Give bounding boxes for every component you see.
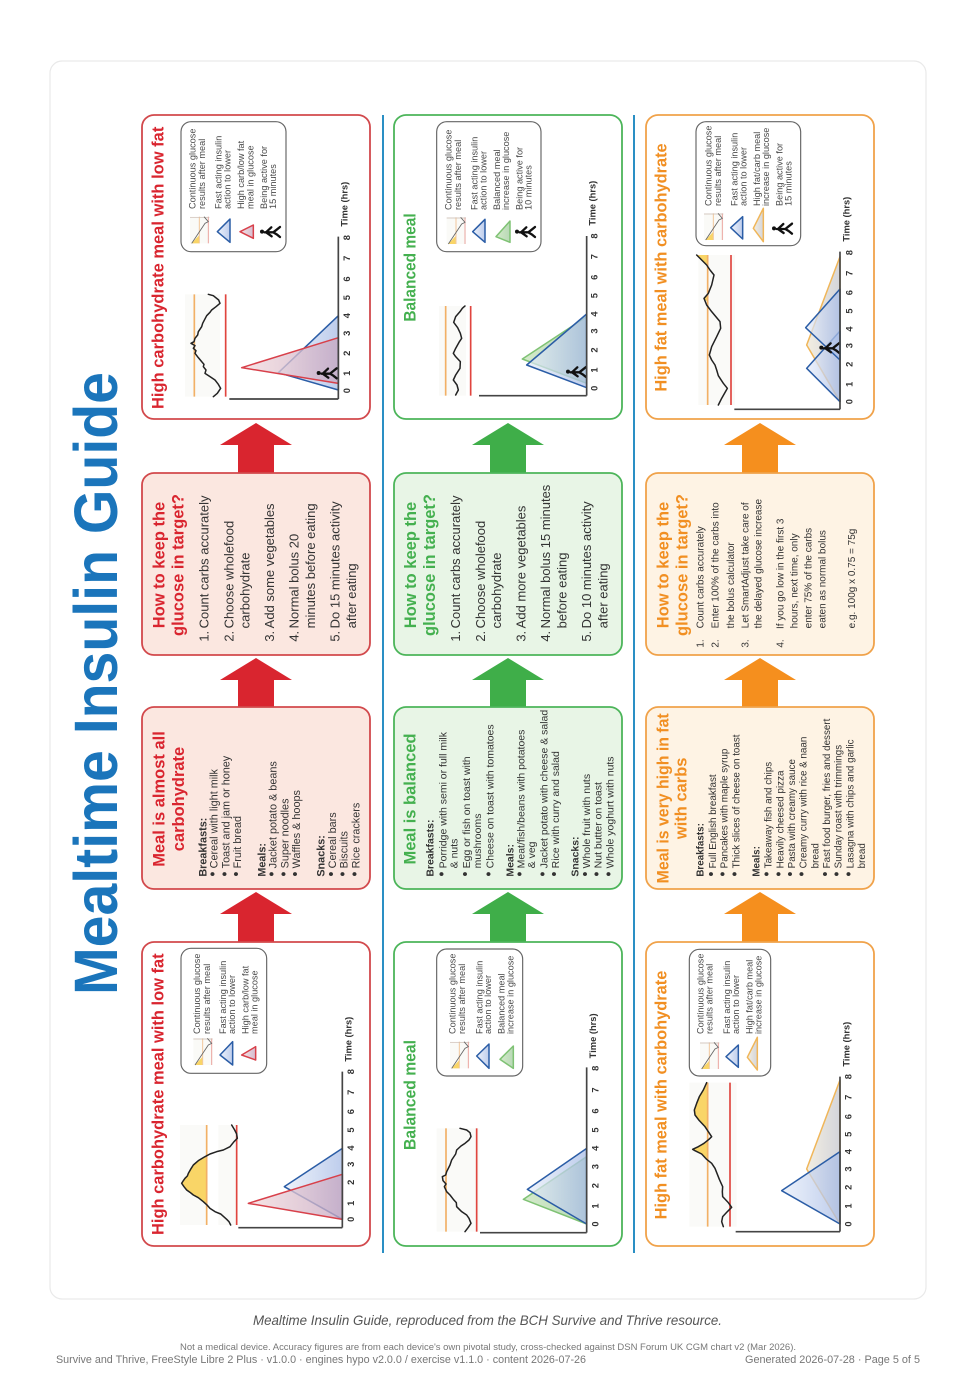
panel: meal is balanced: Meals: bbox=[505, 844, 516, 877]
chart axes and triangles: 6 bbox=[346, 1109, 356, 1114]
chart axes and triangles bbox=[229, 182, 352, 399]
panel: how to keep the glucose in target, red: Add some vegetables bbox=[262, 503, 277, 628]
panel: meal is almost all carbohydrate: Snacks: bbox=[315, 835, 327, 877]
panel: meal is balanced: Meat/fish/beans with potatoes bbox=[516, 730, 527, 868]
chart axes and triangles: 7 bbox=[346, 1090, 356, 1095]
heading: High fat meal with carbohydrate bbox=[653, 971, 671, 1219]
panel: meal is almost all carbohydrate: Toast and jam or honey bbox=[220, 755, 232, 868]
panel: how to keep the glucose in target, green: 4. bbox=[538, 631, 553, 642]
panel: how to keep the glucose in target, orange: e.g. 100g x 0.75 = 75g bbox=[847, 529, 858, 628]
panel: meal is almost all carbohydrate bbox=[142, 707, 370, 889]
arrows: green column bbox=[472, 423, 544, 942]
glucose trace bbox=[697, 255, 735, 405]
panel: how to keep the glucose in target, orange: eaten as normal bolus bbox=[818, 530, 829, 628]
chart axes and triangles: 3 bbox=[590, 1164, 600, 1169]
panel: meal is balanced: • bbox=[590, 872, 606, 877]
panel: meal is very high in fat with carbs: bread bbox=[810, 843, 821, 868]
panel: meal is balanced: & veg bbox=[527, 841, 538, 868]
chart axes and triangles: 3 bbox=[346, 1162, 356, 1167]
panel: meal is balanced: • bbox=[601, 872, 617, 877]
chart axes and triangles: 3 bbox=[590, 328, 600, 334]
panel: how to keep the glucose in target, red: glucose in target? bbox=[169, 494, 187, 636]
panel: meal is very high in fat with carbs: • bbox=[795, 872, 811, 877]
chart axes and triangles: 6 bbox=[342, 276, 352, 282]
chart axes and triangles: 4 bbox=[844, 1148, 854, 1154]
panel: meal is almost all carbohydrate: Meals: bbox=[257, 843, 269, 877]
legend: meal in glucose bbox=[250, 970, 260, 1034]
legend: 15 minutes bbox=[784, 161, 794, 206]
panel: how to keep the glucose in target, orange: Enter 100% of the carbs into bbox=[710, 502, 721, 628]
panel: meal is balanced: Jacket potato with cheese & salad bbox=[540, 710, 551, 868]
panel: meal is very high in fat with carbs: • bbox=[818, 872, 834, 877]
legend: Fast acting insulin bbox=[722, 961, 732, 1034]
legend: High carb/low fat bbox=[240, 965, 250, 1034]
panel: meal is very high in fat with carbs: with carbs bbox=[673, 758, 691, 840]
chart axes and triangles: Time (hrs) bbox=[340, 182, 350, 227]
chart axes and triangles: Time (hrs) bbox=[841, 197, 851, 242]
legend: Balanced meal bbox=[496, 973, 506, 1034]
chart axes and triangles: 7 bbox=[844, 1095, 854, 1100]
chart axes and triangles: 7 bbox=[342, 256, 352, 261]
panel: meal is almost all carbohydrate: Rice crackers bbox=[350, 802, 362, 868]
panel: meal is almost all carbohydrate: • bbox=[288, 872, 304, 877]
panel: how to keep the glucose in target, red: 5. bbox=[327, 631, 342, 642]
chart axes and triangles: 4 bbox=[590, 311, 600, 317]
chart axes and triangles: 6 bbox=[844, 290, 854, 295]
panel: meal is balanced bbox=[394, 707, 622, 889]
legend: High fat/carb meal bbox=[752, 132, 762, 206]
panel: meal is balanced: Rice with curry and salad bbox=[551, 751, 562, 868]
panel: meal is very high in fat with carbs: • bbox=[841, 872, 857, 877]
panel: meal is very high in fat with carbs: Breakfasts: bbox=[695, 823, 706, 877]
chart axes and triangles: Time (hrs) bbox=[588, 1013, 598, 1058]
panel: how to keep the glucose in target, red: 4. bbox=[286, 631, 301, 642]
panel: meal is balanced: Meal is balanced bbox=[402, 733, 420, 865]
legend: Continuous glucose bbox=[188, 129, 198, 209]
legend: results after meal bbox=[197, 139, 207, 209]
panel: how to keep the glucose in target, orange: hours, next time, only bbox=[790, 533, 801, 628]
legend: High carb/low fat bbox=[236, 140, 246, 209]
panel: how to keep the glucose in target, green: Choose wholefood bbox=[473, 521, 488, 628]
panel: meal is very high in fat with carbs: Lasagna with chips and garlic bbox=[845, 739, 856, 868]
panel: how to keep the glucose in target, green: carbohydrate bbox=[489, 553, 504, 628]
panel: meal is almost all carbohydrate: Breakfasts: bbox=[198, 818, 210, 877]
heading: Balanced meal bbox=[402, 1040, 420, 1150]
panel: meal is very high in fat with carbs: Fast food burger, fries and dessert bbox=[822, 718, 833, 868]
panel: how to keep the glucose in target, red: Normal bolus 20 bbox=[286, 534, 301, 628]
title: Mealtime Insulin Guide bbox=[62, 372, 130, 995]
chart axes and triangles: 0 bbox=[342, 388, 352, 393]
chart axes and triangles: 0 bbox=[590, 1221, 600, 1227]
panel: meal is balanced: • bbox=[481, 872, 497, 877]
chart axes and triangles: 8 bbox=[590, 233, 600, 239]
panel: meal is very high in fat with carbs: bread bbox=[857, 843, 868, 868]
chart axes and triangles: Time (hrs) bbox=[588, 181, 598, 226]
panel: meal is balanced: & nuts bbox=[450, 839, 461, 868]
panel: meal is very high in fat with carbs: • bbox=[783, 872, 799, 877]
chart axes and triangles bbox=[736, 1022, 854, 1232]
glucose trace bbox=[689, 1083, 737, 1227]
panel: meal is balanced: • bbox=[578, 872, 594, 877]
panel: how to keep the glucose in target, orange: 1. bbox=[695, 639, 706, 648]
panel: how to keep the glucose in target, red: 2. bbox=[221, 631, 236, 642]
chart axes and triangles: 7 bbox=[590, 254, 600, 259]
chart axes and triangles bbox=[238, 1017, 356, 1228]
chart axes and triangles: 5 bbox=[590, 1127, 600, 1133]
panel: meal is very high in fat with carbs: Sunday roast with trimmings bbox=[834, 745, 845, 868]
chart axes and triangles: 8 bbox=[844, 250, 854, 255]
chart axes and triangles bbox=[480, 1013, 600, 1233]
heading: High fat meal with carbohydrate bbox=[653, 143, 671, 392]
panel: how to keep the glucose in target, orange: the delayed glucose increase bbox=[754, 499, 765, 628]
panel: meal is almost all carbohydrate: Fruit bread bbox=[232, 816, 244, 868]
panel: meal is very high in fat with carbs: Pasta with creamy sauce bbox=[787, 759, 798, 868]
legend: results after meal bbox=[453, 140, 463, 210]
panel: meal is almost all carbohydrate: • bbox=[324, 872, 340, 877]
panel: how to keep the glucose in target, orange: glucose in target? bbox=[673, 494, 691, 636]
panel: meal is almost all carbohydrate: carbohydrate bbox=[170, 747, 188, 851]
panel: meal is balanced: Nut butter on toast bbox=[594, 782, 605, 868]
footer version info: Survive and Thrive, FreeStyle Libre 2 Plus · v1.0.0 · engines hypo v2.0.0 / exercise v1.1.0 · content 2026-07-26 bbox=[56, 1354, 586, 1366]
panel: how to keep the glucose in target, green: Count carbs accurately bbox=[448, 495, 463, 628]
panel: meal is balanced: Egg or fish on toast with bbox=[462, 756, 473, 868]
chart axes and triangles: 2 bbox=[844, 362, 854, 367]
legend: Continuous glucose bbox=[448, 954, 458, 1034]
panel: meal is balanced: • bbox=[536, 872, 552, 877]
panel: how to keep the glucose in target, red: Do 15 minutes activity bbox=[327, 501, 342, 628]
chart axes and triangles: 1 bbox=[346, 1201, 356, 1206]
panel: meal is balanced: Whole yoghurt with nuts bbox=[605, 756, 616, 868]
panel: how to keep the glucose in target, red: 1. bbox=[196, 631, 211, 642]
legend: results after meal bbox=[705, 964, 715, 1034]
chart axes and triangles: 0 bbox=[844, 1221, 854, 1227]
chart axes and triangles: 6 bbox=[590, 275, 600, 280]
chart axes and triangles: 5 bbox=[346, 1127, 356, 1133]
panel: meal is very high in fat with carbs: Full English breakfast bbox=[708, 774, 719, 868]
chart axes and triangles: 2 bbox=[590, 1183, 600, 1188]
chart axes and triangles: 1 bbox=[342, 371, 352, 376]
panel: meal is balanced: Breakfasts: bbox=[425, 820, 436, 877]
legend: action to lower bbox=[223, 150, 233, 209]
legend: increase in glucose bbox=[761, 128, 771, 206]
panel: how to keep the glucose in target, orange: 3. bbox=[740, 639, 751, 648]
legend: meal in glucose bbox=[245, 145, 255, 209]
legend: Continuous glucose bbox=[444, 130, 454, 210]
panel: meal is very high in fat with carbs: • bbox=[771, 872, 787, 877]
panel: meal is almost all carbohydrate: • bbox=[335, 872, 351, 877]
panel: meal is very high in fat with carbs: • bbox=[727, 872, 743, 877]
panel: how to keep the glucose in target, orange bbox=[646, 473, 874, 655]
chart axes and triangles: 8 bbox=[844, 1074, 854, 1079]
legend: Fast acting insulin bbox=[730, 133, 740, 206]
chart axes and triangles: Time (hrs) bbox=[841, 1022, 851, 1067]
legend: Continuous glucose bbox=[695, 954, 705, 1034]
chart axes and triangles: Time (hrs) bbox=[344, 1017, 354, 1062]
panel: how to keep the glucose in target, green: 2. bbox=[473, 631, 488, 642]
panel: how to keep the glucose in target, red: 3. bbox=[262, 631, 277, 642]
panel: meal is almost all carbohydrate: • bbox=[265, 872, 281, 877]
legend: Fast acting insulin bbox=[214, 136, 224, 209]
arrows: red column bbox=[220, 423, 292, 942]
heading: High carbohydrate meal with low fat bbox=[149, 953, 167, 1235]
legend: 15 minutes bbox=[268, 164, 278, 209]
panel: meal is balanced: • bbox=[512, 872, 528, 877]
panel: how to keep the glucose in target, red: after eating bbox=[344, 563, 359, 628]
panel: meal is balanced: Porridge with semi or full milk bbox=[439, 731, 450, 868]
glucose trace bbox=[439, 306, 471, 396]
panel: balanced meal without activity bbox=[394, 942, 622, 1246]
footer page info: Generated 2026-07-28 · Page 5 of 5 bbox=[745, 1354, 920, 1366]
panel: how to keep the glucose in target, red bbox=[142, 473, 370, 655]
panel: meal is almost all carbohydrate: Biscuits bbox=[338, 830, 350, 868]
panel: meal is almost all carbohydrate: • bbox=[347, 872, 363, 877]
disclaimer: Not a medical device. Accuracy figures are from each device's own pivotal study, cross-checked against DSN Forum UK CGM chart v2 (Mar 2026). bbox=[180, 1342, 796, 1353]
chart axes and triangles: 8 bbox=[346, 1069, 356, 1074]
panel: how to keep the glucose in target, green: 3. bbox=[514, 631, 529, 642]
panel: how to keep the glucose in target, orange: If you go low in the first 3 bbox=[775, 518, 786, 629]
chart axes and triangles: 4 bbox=[342, 312, 352, 318]
legend: Being active for bbox=[775, 143, 785, 206]
chart axes and triangles: 1 bbox=[844, 382, 854, 387]
glucose trace bbox=[437, 1128, 479, 1232]
panel: how to keep the glucose in target, orange: the bolus calculator bbox=[726, 542, 737, 628]
chart axes and triangles: 5 bbox=[844, 1132, 854, 1137]
chart axes and triangles: 2 bbox=[342, 351, 352, 356]
chart axes and triangles: 3 bbox=[844, 343, 854, 348]
legend: Being active for bbox=[515, 147, 525, 210]
legend: 10 minutes bbox=[524, 165, 534, 210]
legend: Fast acting insulin bbox=[470, 137, 480, 210]
chart axes and triangles bbox=[479, 181, 600, 396]
panel: meal is balanced: • bbox=[435, 872, 451, 877]
glucose trace bbox=[185, 294, 226, 397]
arrows: orange column bbox=[724, 423, 796, 942]
panel: meal is balanced: Cheese on toast with tomatoes bbox=[485, 724, 496, 868]
chart axes and triangles: 5 bbox=[590, 293, 600, 298]
legend: action to lower bbox=[227, 975, 237, 1034]
chart axes and triangles: 5 bbox=[342, 295, 352, 300]
chart axes and triangles: 1 bbox=[844, 1203, 854, 1209]
chart axes and triangles bbox=[734, 197, 854, 409]
chart axes and triangles: 3 bbox=[342, 331, 352, 336]
chart axes and triangles: 8 bbox=[590, 1066, 600, 1071]
chart axes and triangles: 5 bbox=[844, 308, 854, 314]
panel: meal is almost all carbohydrate: Waffles & hoops bbox=[291, 790, 303, 868]
panel: how to keep the glucose in target, green: before eating bbox=[555, 553, 570, 628]
panel: how to keep the glucose in target, green: 5. bbox=[579, 631, 594, 642]
legend: increase in glucose bbox=[505, 956, 515, 1034]
chart axes and triangles: 6 bbox=[844, 1114, 854, 1119]
panel: meal is almost all carbohydrate: Meal is almost all bbox=[150, 731, 168, 867]
legend: Fast acting insulin bbox=[474, 961, 484, 1034]
panel: meal is almost all carbohydrate: Cereal bars bbox=[327, 812, 339, 868]
heading: High carbohydrate meal with low fat bbox=[149, 126, 167, 409]
panel: meal is very high in fat with carbs: Takeaway fish and chips bbox=[764, 762, 775, 868]
panel: meal is very high in fat with carbs: • bbox=[830, 872, 846, 877]
legend: increase in glucose bbox=[754, 956, 764, 1034]
chart axes and triangles: 0 bbox=[346, 1217, 356, 1222]
panel: how to keep the glucose in target, red: How to keep the bbox=[150, 502, 168, 628]
legend: results after meal bbox=[713, 136, 723, 206]
panel: how to keep the glucose in target, orange: Let SmartAdjust take care of bbox=[740, 502, 751, 628]
legend: results after meal bbox=[202, 964, 212, 1034]
caption: Mealtime Insulin Guide, reproduced from the BCH Survive and Thrive resource. bbox=[253, 1312, 722, 1328]
chart axes and triangles: 1 bbox=[590, 1203, 600, 1209]
chart axes and triangles: 0 bbox=[844, 399, 854, 404]
panel: meal is very high in fat with carbs: Heavily cheesed pizza bbox=[775, 770, 786, 868]
legend bbox=[437, 122, 541, 252]
panel: meal is very high in fat with carbs: Meals: bbox=[751, 846, 762, 877]
panel: meal is very high in fat with carbs: Thick slices of cheese on toast bbox=[731, 734, 742, 868]
panel: how to keep the glucose in target, green: Add more vegetables bbox=[514, 505, 529, 628]
legend: increase in glucose bbox=[501, 132, 511, 210]
chart axes and triangles: 2 bbox=[590, 347, 600, 353]
legend bbox=[181, 122, 286, 252]
legend: action to lower bbox=[479, 151, 489, 210]
panel: meal is balanced: Whole fruit with nuts bbox=[582, 774, 593, 868]
legend bbox=[437, 949, 523, 1076]
panel: how to keep the glucose in target, orange: 2. bbox=[710, 639, 721, 648]
panel: meal is balanced: • bbox=[458, 872, 474, 877]
panel: high carb meal with activity bbox=[142, 115, 370, 419]
panel: how to keep the glucose in target, green: How to keep the bbox=[402, 502, 420, 628]
chart axes and triangles: 0 bbox=[590, 386, 600, 391]
panel: meal is almost all carbohydrate: • bbox=[276, 872, 292, 877]
panel: how to keep the glucose in target, green: 1. bbox=[448, 631, 463, 642]
chart axes and triangles: 8 bbox=[342, 235, 352, 240]
legend: action to lower bbox=[731, 975, 741, 1034]
panel: how to keep the glucose in target, green: Normal bolus 15 minutes bbox=[538, 484, 553, 628]
legend: action to lower bbox=[483, 975, 493, 1034]
chart axes and triangles: 7 bbox=[590, 1087, 600, 1093]
panel: meal is almost all carbohydrate: Jacket potato & beans bbox=[268, 761, 280, 868]
panel: high fat meal without activity bbox=[646, 942, 874, 1246]
chart axes and triangles: 7 bbox=[844, 271, 854, 276]
heading: Balanced meal bbox=[402, 213, 420, 322]
panel: meal is almost all carbohydrate: • bbox=[229, 872, 245, 877]
panel: meal is very high in fat with carbs: Meal is very high in fat bbox=[654, 713, 672, 883]
panel: meal is balanced: Snacks: bbox=[570, 836, 581, 877]
panel: how to keep the glucose in target, green: glucose in target? bbox=[421, 494, 439, 636]
panel: how to keep the glucose in target, red: minutes before eating bbox=[303, 503, 318, 628]
panel: meal is almost all carbohydrate: Super noodles bbox=[279, 798, 291, 868]
legend: Fast acting insulin bbox=[218, 961, 228, 1034]
panel: how to keep the glucose in target, orange: How to keep the bbox=[654, 502, 672, 628]
legend: results after meal bbox=[457, 964, 467, 1034]
panel: meal is balanced: mushrooms bbox=[473, 814, 484, 868]
panel: meal is very high in fat with carbs: Creamy curry with rice & naan bbox=[799, 737, 810, 868]
panel: high carb meal without activity bbox=[142, 942, 370, 1246]
glucose trace bbox=[180, 1125, 237, 1225]
legend: Continuous glucose bbox=[704, 126, 714, 206]
panel: how to keep the glucose in target, orange: Count carbs accurately bbox=[695, 526, 706, 628]
legend bbox=[181, 948, 267, 1073]
chart axes and triangles: 2 bbox=[346, 1180, 356, 1185]
chart axes and triangles: 4 bbox=[590, 1145, 600, 1151]
panel: meal is very high in fat with carbs: • bbox=[704, 872, 720, 877]
panel: meal is almost all carbohydrate: • bbox=[205, 872, 221, 877]
legend: Being active for bbox=[259, 146, 269, 209]
legend bbox=[689, 949, 771, 1076]
panel: meal is almost all carbohydrate: Cereal with light milk bbox=[208, 768, 220, 868]
column dividers bbox=[383, 115, 634, 1253]
panel: meal is very high in fat with carbs: • bbox=[760, 872, 776, 877]
panel: how to keep the glucose in target, orange: 4. bbox=[775, 639, 786, 648]
legend: Continuous glucose bbox=[192, 954, 202, 1034]
chart axes and triangles: 2 bbox=[844, 1185, 854, 1190]
panel: meal is balanced: • bbox=[547, 872, 563, 877]
panel: balanced meal with activity bbox=[394, 115, 622, 419]
legend: action to lower bbox=[739, 147, 749, 206]
panel: how to keep the glucose in target, red: Count carbs accurately bbox=[196, 495, 211, 628]
panel: meal is very high in fat with carbs bbox=[646, 707, 874, 889]
legend: High fat/carb meal bbox=[745, 960, 755, 1034]
legend bbox=[696, 122, 801, 246]
panel: how to keep the glucose in target, red: carbohydrate bbox=[237, 553, 252, 628]
panel: meal is very high in fat with carbs: Pancakes with maple syrup bbox=[720, 748, 731, 868]
panel: how to keep the glucose in target, orange: enter 75% of the carbs bbox=[804, 528, 815, 628]
chart axes and triangles: 4 bbox=[346, 1145, 356, 1151]
legend: Balanced meal bbox=[492, 149, 502, 210]
chart axes and triangles: 3 bbox=[844, 1166, 854, 1172]
panel: meal is very high in fat with carbs: • bbox=[716, 872, 732, 877]
chart axes and triangles: 6 bbox=[590, 1108, 600, 1114]
panel: how to keep the glucose in target, green bbox=[394, 473, 622, 655]
panel: how to keep the glucose in target, green: after eating bbox=[596, 563, 611, 628]
panel: high fat meal with activity bbox=[646, 115, 874, 419]
panel: how to keep the glucose in target, green: Do 10 minutes activity bbox=[579, 501, 594, 628]
chart axes and triangles: 4 bbox=[844, 326, 854, 332]
panel: how to keep the glucose in target, red: Choose wholefood bbox=[221, 521, 236, 628]
chart axes and triangles: 1 bbox=[590, 367, 600, 373]
panel: meal is almost all carbohydrate: • bbox=[217, 872, 233, 877]
